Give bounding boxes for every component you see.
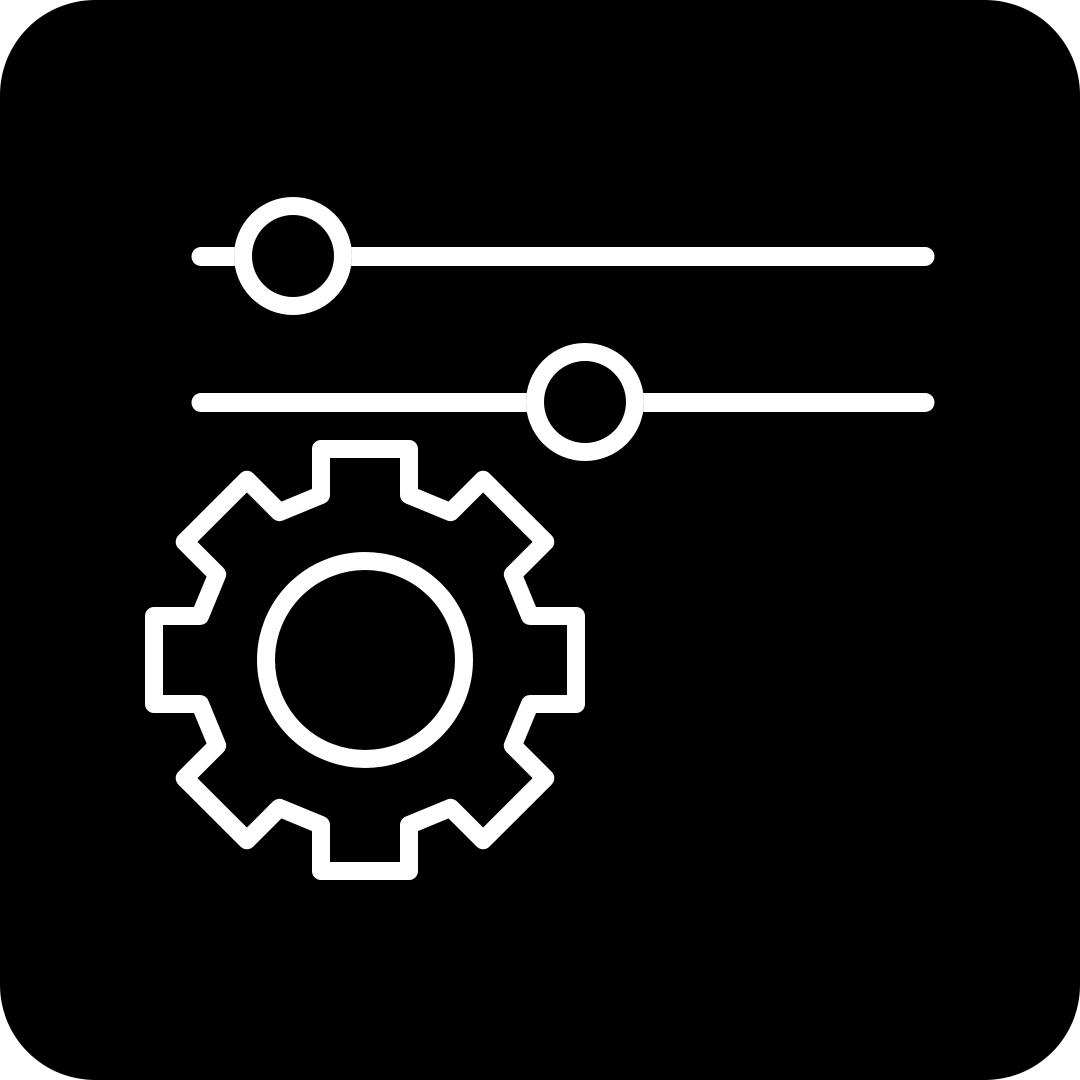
slider 1 — [201, 197, 925, 315]
slider 2 — [201, 343, 925, 461]
gear icon — [154, 449, 576, 871]
